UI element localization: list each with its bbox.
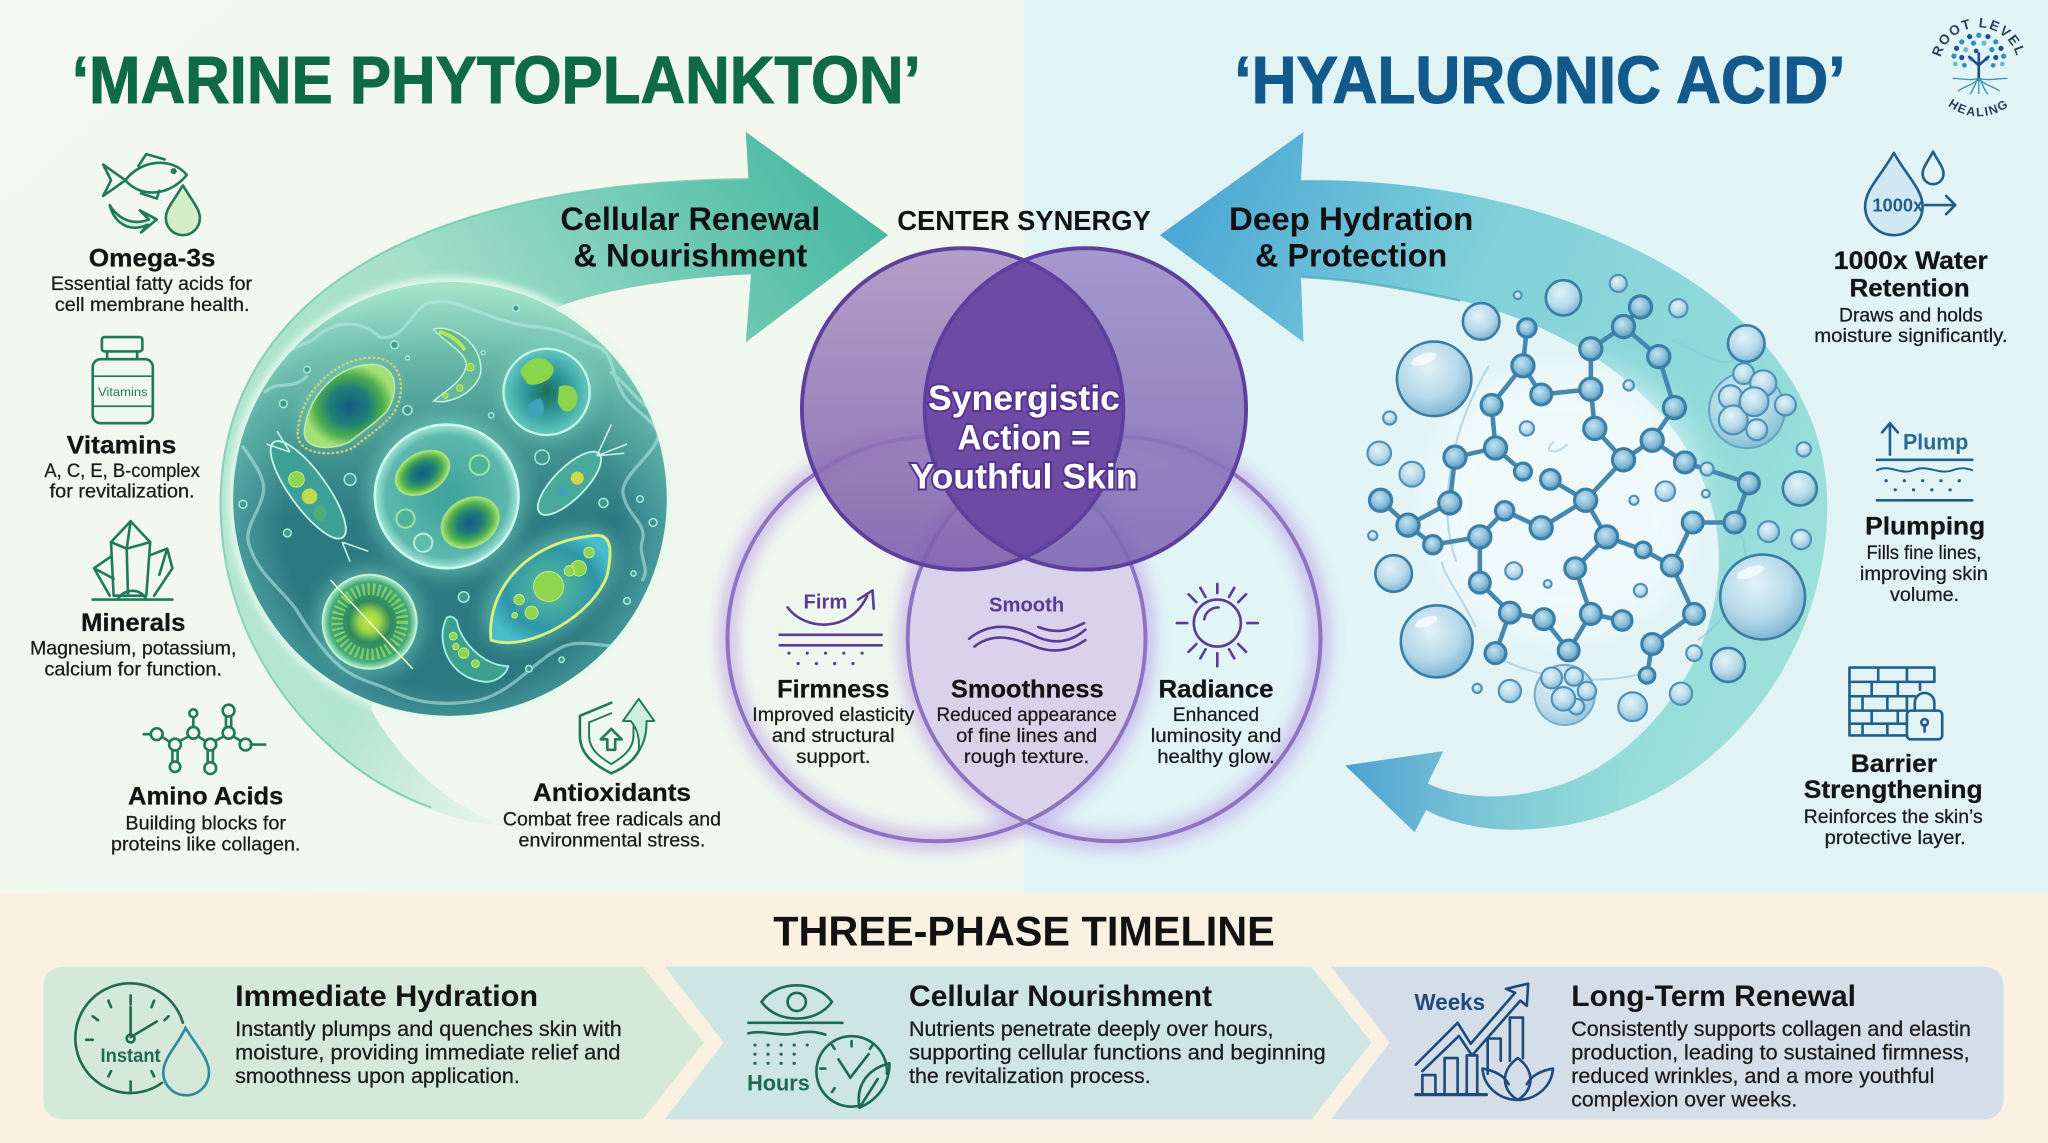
icon: smooth waves: Smooth bbox=[989, 594, 1064, 616]
item: minerals: calcium for function. bbox=[44, 659, 222, 680]
venn top right circle bbox=[925, 248, 1246, 570]
item: minerals: Magnesium, potassium, bbox=[30, 638, 236, 659]
illustration: phytoplankton globe bbox=[228, 277, 672, 721]
item: antioxidants: environmental stress. bbox=[519, 830, 705, 851]
icon: fish and oil drop bbox=[103, 154, 200, 235]
bubble cluster: upper right bbox=[1709, 363, 1796, 448]
title: hyaluronic acid: ‘HYALURONIC ACID’ bbox=[1234, 44, 1846, 118]
item: vitamins: Vitamins bbox=[67, 432, 176, 459]
icon: plump layers: Plump bbox=[1903, 429, 1968, 454]
phase 2: cellular nourishment bbox=[665, 967, 1371, 1119]
item: 1000x water retention: Draws and holds bbox=[1839, 305, 1983, 326]
venn outer circle: radiance bbox=[908, 436, 1320, 841]
chevron panel bbox=[665, 967, 1371, 1119]
cell: left diatom bbox=[259, 431, 368, 562]
icon: instant clock and drop bbox=[75, 983, 209, 1095]
item: amino acids: Building blocks for bbox=[125, 813, 286, 834]
label: deep hydration and protection bbox=[1229, 200, 1473, 273]
benefit: radiance bbox=[1151, 584, 1281, 768]
venn outer circle: firmness bbox=[728, 436, 1145, 841]
logo: root level healing bbox=[1932, 18, 2024, 116]
item: barrier strengthening: Barrier bbox=[1851, 751, 1937, 778]
icon: brick wall with lock bbox=[1849, 668, 1942, 739]
synergy text: Youthful Skin bbox=[910, 458, 1138, 497]
icon: water drop 1000x: 1000x bbox=[1872, 195, 1924, 216]
icon: weeks growth chart and lotus: Weeks bbox=[1415, 989, 1485, 1015]
arrow: cellular renewal curved green arrow bbox=[221, 132, 888, 836]
phase 1: immediate hydration: moisture, providing immediate relief and bbox=[235, 1041, 620, 1064]
icon: firm lift bbox=[780, 590, 882, 664]
icon: shield with arrow bbox=[580, 699, 654, 773]
cell: right diatom bbox=[536, 424, 628, 516]
large water bubbles bbox=[1375, 280, 1817, 682]
logo: root level healing: HEALING bbox=[1948, 98, 2008, 116]
phase 1: immediate hydration: Instantly plumps and quenches skin with bbox=[235, 1018, 622, 1041]
synergy text bbox=[910, 379, 1138, 497]
chart: synergy venn diagram bbox=[728, 248, 1320, 841]
item: antioxidants: Antioxidants bbox=[533, 780, 691, 807]
item: barrier strengthening: Strengthening bbox=[1804, 777, 1983, 804]
venn top outlines bbox=[802, 248, 1246, 570]
benefit: radiance: luminosity and bbox=[1151, 726, 1281, 747]
icon: eye, skin layers, clock and leaf: Hours bbox=[747, 1071, 810, 1096]
cell: big lens bbox=[491, 535, 610, 643]
benefit: smoothness: Smoothness bbox=[951, 677, 1104, 704]
item: 1000x water retention: Retention bbox=[1849, 276, 1970, 303]
chevron panel bbox=[1331, 967, 2004, 1119]
bubble cluster: lower bbox=[1535, 665, 1596, 725]
benefit: radiance: healthy glow. bbox=[1157, 747, 1275, 768]
phase 3: long-term renewal: complexion over weeks. bbox=[1571, 1088, 1797, 1111]
section: center synergy heading: CENTER SYNERGY bbox=[897, 205, 1151, 236]
cell: large central bbox=[375, 425, 519, 568]
item: barrier strengthening: Reinforces the skin’s bbox=[1804, 807, 1983, 828]
synergy text: Synergistic bbox=[928, 379, 1120, 418]
item: barrier strengthening bbox=[1804, 668, 1983, 849]
chevron panel bbox=[43, 967, 704, 1119]
icon: plump layers bbox=[1877, 423, 1972, 500]
item: antioxidants: Combat free radicals and bbox=[503, 810, 721, 831]
venn top left circle bbox=[802, 248, 1123, 570]
item: antioxidants bbox=[503, 699, 721, 851]
item: vitamins: for revitalization. bbox=[50, 482, 195, 503]
heading: three-phase timeline: THREE-PHASE TIMELINE bbox=[773, 908, 1275, 955]
item: 1000x water retention bbox=[1814, 152, 2008, 347]
icon: firm lift: Firm bbox=[804, 592, 847, 614]
small water bubbles bbox=[1368, 275, 1811, 721]
cell: crescent top bbox=[434, 328, 481, 402]
glow halo behind cells bbox=[295, 362, 622, 682]
icon: instant clock and drop: Instant bbox=[101, 1045, 161, 1067]
label: cellular renewal and nourishment: & Nourishment bbox=[573, 236, 807, 273]
icon: crystals bbox=[93, 521, 172, 600]
phase 1: immediate hydration: Immediate Hydration bbox=[235, 980, 538, 1013]
phase 3: long-term renewal bbox=[1331, 967, 2004, 1119]
cell: bean bbox=[298, 358, 401, 453]
phase 3: long-term renewal: Consistently supports collagen and elastin bbox=[1571, 1018, 1971, 1041]
phase 3: long-term renewal: reduced wrinkles, and a more youthful bbox=[1571, 1065, 1934, 1088]
venn top intersection bbox=[926, 262, 1122, 555]
illustration: hyaluronic acid molecule network bbox=[1368, 275, 1817, 725]
icon: eye, skin layers, clock and leaf bbox=[747, 985, 889, 1108]
venn lens: smoothness bbox=[916, 560, 1144, 820]
item: amino acids: Amino Acids bbox=[128, 784, 283, 811]
molecule bonds bbox=[1381, 307, 1749, 675]
small particles bbox=[239, 305, 657, 672]
arrow: deep hydration curved blue arrow bbox=[1160, 132, 1827, 832]
item: amino acids bbox=[111, 705, 300, 855]
icon: vitamin bottle bbox=[93, 337, 153, 423]
item: 1000x water retention: moisture significantly. bbox=[1814, 326, 2008, 347]
item: vitamins bbox=[44, 337, 200, 503]
phase 2: cellular nourishment: Cellular Nourishment bbox=[909, 980, 1212, 1013]
cell: crescent bottom bbox=[443, 617, 508, 682]
benefit: firmness: and structural bbox=[772, 726, 895, 747]
flowing membranes bbox=[243, 302, 666, 703]
icon: water drop 1000x bbox=[1865, 152, 1955, 235]
benefit: firmness bbox=[752, 590, 915, 768]
item: omega-3s: Essential fatty acids for bbox=[51, 274, 252, 295]
molecule nodes bbox=[1369, 296, 1759, 683]
phase 3: long-term renewal: Long-Term Renewal bbox=[1571, 980, 1856, 1013]
phase 2: cellular nourishment: supporting cellular functions and beginning bbox=[909, 1041, 1326, 1064]
phase 1: immediate hydration bbox=[43, 967, 704, 1119]
label: cellular renewal and nourishment bbox=[560, 200, 820, 273]
item: plumping bbox=[1860, 423, 1988, 606]
benefit: smoothness: of fine lines and bbox=[956, 726, 1097, 747]
background: left green panel bbox=[0, 0, 1024, 893]
item: omega-3s: cell membrane health. bbox=[55, 295, 249, 316]
icon: smooth waves bbox=[969, 594, 1085, 650]
venn glow bbox=[728, 436, 1320, 841]
benefit: smoothness: rough texture. bbox=[964, 747, 1089, 768]
icon: vitamin bottle: Vitamins bbox=[98, 385, 148, 399]
synergy text: Action = bbox=[957, 418, 1091, 457]
phase 3: long-term renewal: production, leading to sustained firmness, bbox=[1571, 1041, 1970, 1064]
benefit: firmness: Firmness bbox=[777, 677, 889, 704]
item: plumping: Plumping bbox=[1865, 513, 1985, 540]
benefit: smoothness bbox=[936, 594, 1117, 768]
background: timeline band bbox=[0, 893, 2048, 1143]
item: plumping: volume. bbox=[1890, 585, 1959, 606]
phase 1: immediate hydration: smoothness upon application. bbox=[235, 1065, 520, 1088]
icon: weeks growth chart and lotus bbox=[1415, 984, 1553, 1100]
icon: amino acid chain bbox=[144, 705, 265, 774]
benefit: smoothness: Reduced appearance bbox=[936, 705, 1117, 726]
label: deep hydration and protection: & Protection bbox=[1255, 236, 1447, 273]
benefit: radiance: Enhanced bbox=[1173, 705, 1259, 726]
phase 2: cellular nourishment: Nutrients penetrate deeply over hours, bbox=[909, 1018, 1273, 1041]
cell: round top right bbox=[504, 349, 590, 435]
benefit: firmness: support. bbox=[796, 747, 871, 768]
cell: radial bbox=[323, 575, 417, 669]
logo: root level healing: ROOT LEVEL bbox=[1932, 18, 2024, 56]
item: minerals bbox=[30, 521, 236, 680]
item: amino acids: proteins like collagen. bbox=[111, 834, 300, 855]
item: 1000x water retention: 1000x Water bbox=[1834, 248, 1988, 275]
phase 2: cellular nourishment: the revitalization process. bbox=[909, 1065, 1151, 1088]
icon: sun bbox=[1177, 584, 1258, 666]
item: omega-3s bbox=[51, 154, 252, 316]
benefit: firmness: Improved elasticity bbox=[752, 705, 915, 726]
item: omega-3s: Omega-3s bbox=[89, 245, 216, 272]
label: cellular renewal and nourishment: Cellular Renewal bbox=[560, 200, 820, 237]
item: barrier strengthening: protective layer. bbox=[1825, 828, 1966, 849]
item: minerals: Minerals bbox=[81, 610, 185, 637]
item: vitamins: A, C, E, B-complex bbox=[44, 461, 200, 482]
background: right blue panel bbox=[1024, 0, 2048, 893]
label: deep hydration and protection: Deep Hydration bbox=[1229, 200, 1473, 237]
title: marine phytoplankton: ‘MARINE PHYTOPLANKTON’ bbox=[72, 44, 921, 118]
item: plumping: improving skin bbox=[1860, 564, 1988, 585]
benefit: radiance: Radiance bbox=[1159, 677, 1273, 704]
item: plumping: Fills fine lines, bbox=[1866, 543, 1981, 564]
